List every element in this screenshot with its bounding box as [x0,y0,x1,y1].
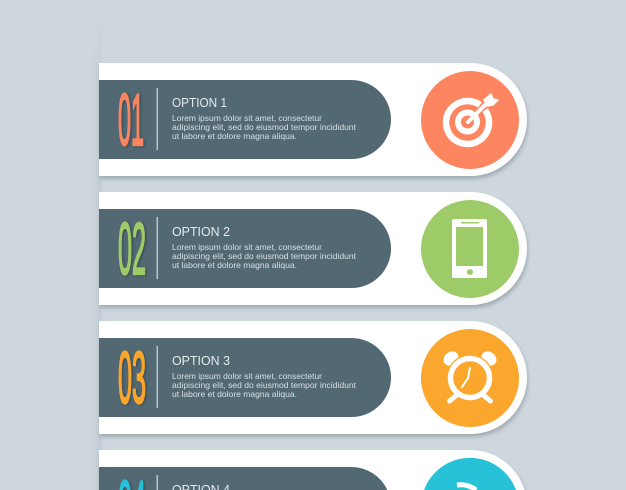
icon circle: target [421,71,519,169]
panel: option 3: 03 [118,338,146,419]
white card 4 [99,450,524,490]
body text 2: Lorem ipsum dolor sit amet, consectetur [172,242,322,252]
white card 1 [99,63,527,176]
panel: option 2 [99,192,527,305]
panel: option 1: 01 [118,80,144,161]
icon: target with dart [446,94,498,144]
white card 3 [99,321,527,434]
body text 3: Lorem ipsum dolor sit amet, consectetur [172,371,322,381]
icon: wifi arcs [457,485,476,490]
body text 3: adipiscing elit, sed do eiusmod tempor incididunt [172,380,357,390]
dark bar 3 [99,338,391,417]
icon circle: phone [421,200,519,298]
divider 1 [156,88,158,150]
panel: option 2: 02 [118,209,146,290]
body text 2 [172,242,357,270]
icon circle: clock [421,329,519,427]
dark bar 1 [99,80,391,159]
heading 3: OPTION 3 [172,354,230,368]
icon: smartphone [452,219,487,278]
divider 4 [156,475,158,490]
dark bar 4 [99,467,387,490]
icon: alarm clock [441,348,499,402]
divider 2 [156,217,158,279]
body text 2: ut labore et dolore magna aliqua. [172,260,297,270]
body text 1 [172,113,357,141]
dark bar 2 [99,209,391,288]
body text 3: ut labore et dolore magna aliqua. [172,389,297,399]
heading 1: OPTION 1 [172,96,227,110]
heading 2: OPTION 2 [172,225,230,239]
body text 3 [172,371,357,399]
panel: option 1 [99,63,527,176]
divider 3 [156,346,158,408]
fold shadow strip [88,15,108,490]
panel: option 3 [99,321,527,434]
icon circle: signal [424,458,516,490]
panel: option 4 [98,450,526,490]
body text 1: adipiscing elit, sed do eiusmod tempor incididunt [172,122,357,132]
body text 2: adipiscing elit, sed do eiusmod tempor incididunt [172,251,357,261]
body text 1: Lorem ipsum dolor sit amet, consectetur [172,113,322,123]
white card 2 [99,192,527,305]
body text 1: ut labore et dolore magna aliqua. [172,131,297,141]
